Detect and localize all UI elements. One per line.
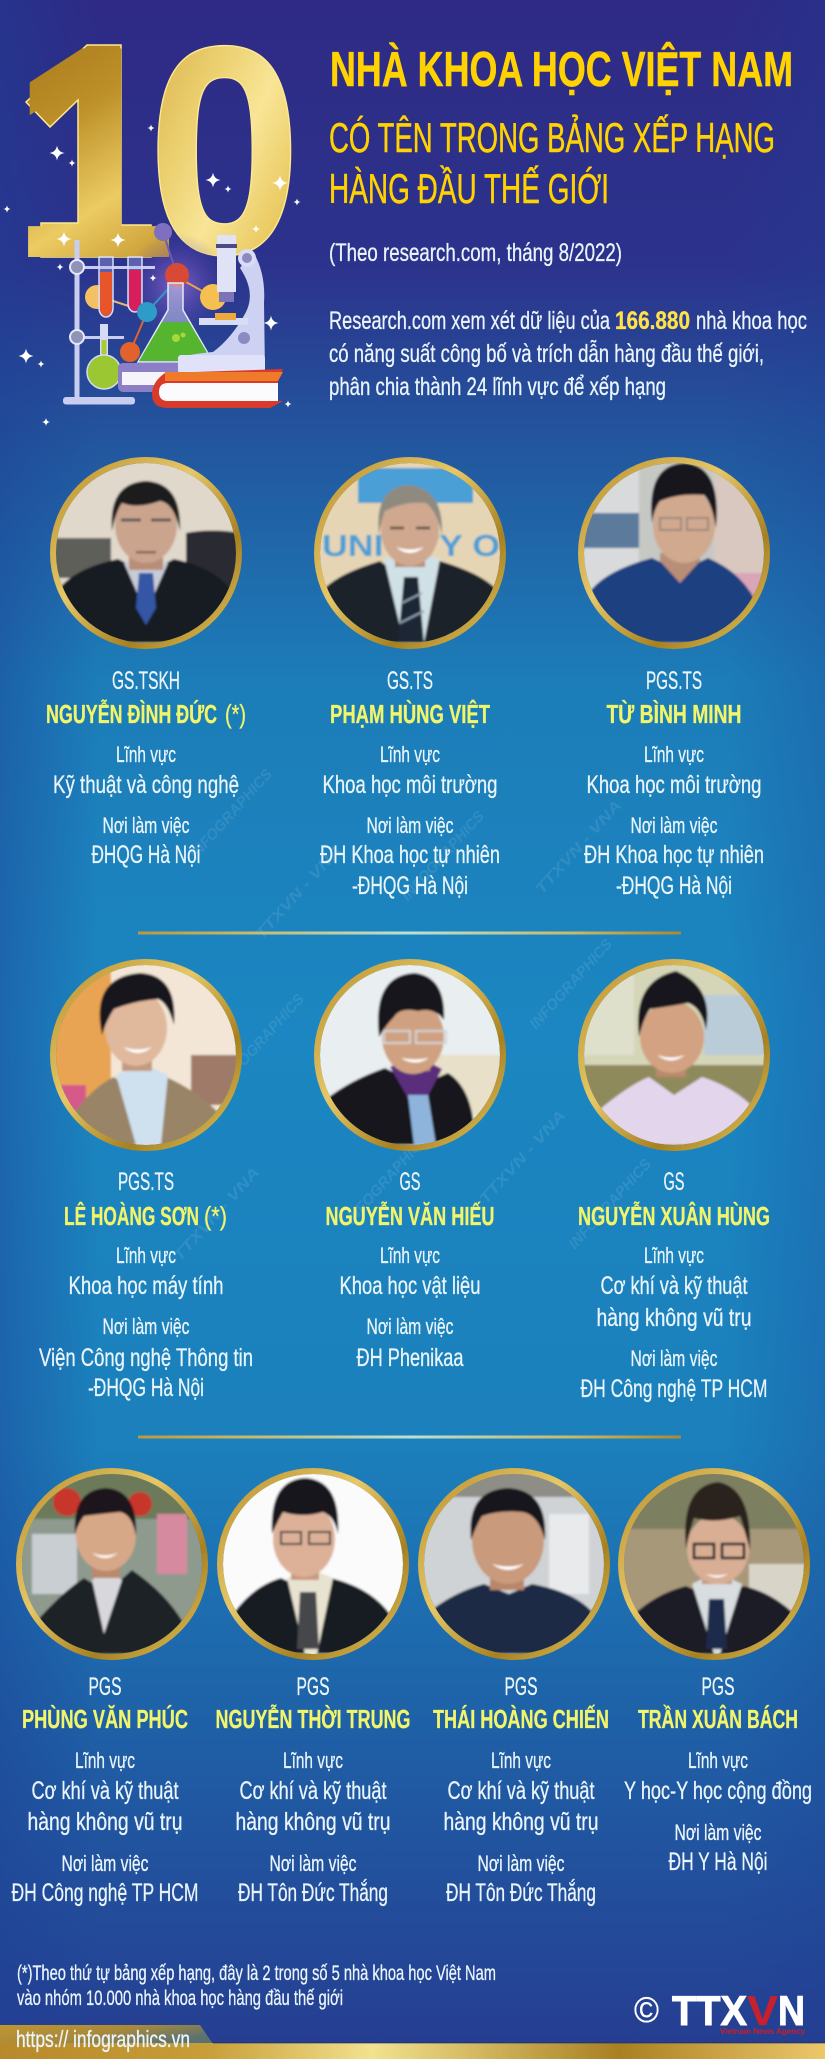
- workplace: [92, 813, 200, 869]
- field: [596, 1243, 752, 1332]
- intro paragraph: 166.880: [615, 307, 690, 335]
- workplace: [12, 1851, 198, 1907]
- name: THÁI HOÀNG CHIẾN: [433, 1704, 609, 1734]
- icon: molecule balls: [120, 223, 226, 362]
- field: Khoa học máy tính: [68, 1272, 224, 1300]
- portrait: [17, 1469, 207, 1659]
- big number 10: [9, 0, 302, 322]
- role: PGS: [702, 1673, 734, 1701]
- field: Kỹ thuật và công nghệ: [53, 771, 239, 799]
- panel: Lê Hoàng Sơn: [39, 960, 253, 1402]
- field: Lĩnh vực: [644, 1243, 704, 1268]
- name: LÊ HOÀNG SƠN: [64, 1201, 199, 1231]
- panel: Từ Bình Minh: [579, 458, 769, 900]
- divider 1: [138, 932, 681, 934]
- workplace: ĐH Phenikaa: [356, 1344, 464, 1372]
- portrait: [218, 1469, 408, 1659]
- workplace: Nơi làm việc: [630, 813, 718, 838]
- field: Lĩnh vực: [283, 1748, 343, 1773]
- portrait: [579, 458, 769, 648]
- workplace: ĐHQG Hà Nội: [92, 841, 200, 869]
- title: [329, 42, 793, 212]
- logo: TTXVN: TTX: [672, 1987, 747, 2034]
- workplace: -ĐHQG Hà Nội: [616, 872, 732, 900]
- field: [28, 1748, 182, 1836]
- name: NGUYỄN VĂN HIẾU: [326, 1201, 494, 1231]
- icon: conical flask: [138, 283, 213, 362]
- intro paragraph: Research.com xem xét dữ liệu của: [329, 307, 610, 335]
- footnote: vào nhóm 10.000 nhà khoa học hàng đầu thế giới: [17, 1987, 343, 2010]
- name: NGUYỄN ĐÌNH ĐỨC: [46, 699, 217, 729]
- logo: TTXVN: [634, 1987, 806, 2036]
- workplace: -ĐHQG Hà Nội: [88, 1374, 204, 1402]
- name: NGUYỄN THỜI TRUNG: [216, 1704, 410, 1734]
- icon: round flask: [87, 324, 121, 389]
- panel: Nguyễn Thời Trung: [216, 1469, 410, 1907]
- field: [68, 1243, 224, 1300]
- intro paragraph: phân chia thành 24 lĩnh vực để xếp hạng: [329, 373, 666, 401]
- name: PHÙNG VĂN PHÚC: [22, 1704, 188, 1734]
- field: [444, 1748, 598, 1836]
- workplace: ĐH Tôn Đức Thắng: [238, 1878, 388, 1907]
- portrait: UNIV TY O: [322, 528, 500, 563]
- workplace: [238, 1851, 388, 1907]
- icon: purple book: [118, 363, 180, 392]
- workplace: Nơi làm việc: [270, 1851, 356, 1876]
- role: PGS.TS: [118, 1168, 174, 1196]
- workplace: [584, 813, 764, 900]
- watermarks: TTXVN - VNA: [252, 842, 345, 943]
- field: Lĩnh vực: [116, 1243, 176, 1268]
- workplace: [356, 1314, 464, 1372]
- icon: retort stand: [63, 240, 155, 404]
- workplace: ĐH Y Hà Nội: [668, 1848, 768, 1876]
- workplace: Nơi làm việc: [630, 1346, 718, 1371]
- watermarks: INFOGRAPHICS: [398, 808, 488, 905]
- panel: Nguyễn Xuân Hùng: [578, 960, 770, 1403]
- workplace: [446, 1851, 596, 1907]
- field: Khoa học môi trường: [586, 771, 762, 799]
- workplace: Nơi làm việc: [478, 1851, 564, 1876]
- role: GS.TSKH: [112, 667, 180, 695]
- field: hàng không vũ trụ: [444, 1808, 598, 1836]
- name: TỪ BÌNH MINH: [606, 699, 742, 729]
- bottom bar: [0, 2025, 825, 2059]
- footnote: [17, 1962, 496, 2010]
- logo: TTXVN: ©: [634, 1989, 659, 2030]
- role: PGS: [504, 1673, 538, 1701]
- field: Khoa học vật liệu: [340, 1272, 480, 1300]
- field: Cơ khí và kỹ thuật: [32, 1777, 179, 1805]
- workplace: ĐH Khoa học tự nhiên: [320, 841, 500, 869]
- role: PGS: [88, 1673, 122, 1701]
- workplace: Nơi làm việc: [102, 813, 190, 838]
- field: Lĩnh vực: [75, 1748, 135, 1773]
- field: Lĩnh vực: [380, 1243, 440, 1268]
- portrait: [315, 960, 505, 1150]
- panel: Nguyễn Đình Đức: [46, 458, 246, 869]
- field: hàng không vũ trụ: [236, 1808, 390, 1836]
- field: Cơ khí và kỹ thuật: [448, 1777, 595, 1805]
- field: Cơ khí và kỹ thuật: [600, 1272, 748, 1300]
- workplace: [39, 1314, 253, 1402]
- field: Lĩnh vực: [644, 742, 704, 767]
- field: Lĩnh vực: [491, 1748, 551, 1773]
- logo: TTXVN: N: [778, 1987, 805, 2034]
- field: Lĩnh vực: [116, 742, 176, 767]
- divider 2: [138, 1436, 681, 1438]
- portrait: [51, 960, 241, 1150]
- illustration: laboratory equipment: [3, 124, 301, 426]
- workplace: Nơi làm việc: [366, 813, 454, 838]
- icon: molecule links: [85, 232, 213, 352]
- role: PGS.TS: [646, 667, 702, 695]
- watermarks: [170, 766, 655, 1265]
- icon: red book: [152, 369, 283, 408]
- portrait: [619, 1469, 809, 1659]
- portrait: [315, 458, 505, 648]
- icon: microscope: [178, 235, 265, 372]
- workplace: [580, 1346, 768, 1403]
- workplace: Viện Công nghệ Thông tin: [39, 1344, 253, 1372]
- workplace: ĐH Khoa học tự nhiên: [584, 841, 764, 869]
- intro paragraph: [329, 307, 807, 401]
- role: PGS: [296, 1673, 330, 1701]
- watermarks: INFOGRAPHICS: [186, 766, 276, 863]
- name: PHẠM HÙNG VIỆT: [330, 699, 490, 729]
- role: GS: [664, 1168, 684, 1196]
- workplace: Nơi làm việc: [674, 1820, 762, 1845]
- url: https:// infographics.vn: [16, 2026, 190, 2052]
- field: [624, 1748, 812, 1805]
- watermarks: INFOGRAPHICS: [565, 1156, 655, 1253]
- panel: Phùng Văn Phúc: [12, 1469, 207, 1907]
- panel: Trần Xuân Bách: [619, 1469, 812, 1876]
- name: (*): [225, 699, 246, 729]
- workplace: Nơi làm việc: [366, 1314, 454, 1339]
- portrait: [579, 960, 769, 1150]
- field: Khoa học môi trường: [322, 771, 498, 799]
- watermarks: TTXVN - VNA: [532, 797, 625, 898]
- icon: sparkles: [3, 124, 301, 426]
- watermarks: TTXVN - VNA: [476, 1107, 569, 1208]
- portrait: [51, 458, 241, 648]
- title: HÀNG ĐẦU THẾ GIỚI: [329, 165, 609, 212]
- field: Lĩnh vực: [380, 742, 440, 767]
- panel: Nguyễn Văn Hiếu: [315, 960, 505, 1372]
- field: [322, 742, 498, 799]
- field: Cơ khí và kỹ thuật: [240, 1777, 387, 1805]
- field: hàng không vũ trụ: [596, 1304, 752, 1332]
- field: [53, 742, 239, 799]
- panel: Thái Hoàng Chiến: [419, 1469, 609, 1907]
- role: GS: [400, 1168, 420, 1196]
- field: Lĩnh vực: [688, 1748, 748, 1773]
- field: hàng không vũ trụ: [28, 1808, 182, 1836]
- watermarks: INFOGRAPHICS: [342, 1131, 432, 1228]
- workplace: [320, 813, 500, 900]
- workplace: ĐH Tôn Đức Thắng: [446, 1878, 596, 1907]
- logo: TTXVN: V: [747, 1987, 778, 2034]
- workplace: Nơi làm việc: [62, 1851, 148, 1876]
- panel: Phạm Hùng Việt: [315, 458, 505, 900]
- workplace: [668, 1820, 768, 1876]
- watermarks: TTXVN - VNA: [170, 1164, 263, 1265]
- field: [340, 1243, 480, 1300]
- workplace: -ĐHQG Hà Nội: [352, 872, 468, 900]
- source note: (Theo research.com, tháng 8/2022): [329, 239, 622, 267]
- watermarks: INFOGRAPHICS: [218, 991, 308, 1088]
- icon: test tubes: [99, 257, 142, 317]
- name: (*): [204, 1201, 227, 1231]
- field: [586, 742, 762, 799]
- workplace: Nơi làm việc: [102, 1314, 190, 1339]
- portrait: [419, 1469, 609, 1659]
- field: [236, 1748, 390, 1836]
- workplace: ĐH Công nghệ TP HCM: [12, 1879, 198, 1907]
- logo: TTXVN: Vietnam News Agency: [720, 2027, 806, 2036]
- footnote: (*)Theo thứ tự bảng xếp hạng, đây là 2 trong số 5 nhà khoa học Việt Nam: [17, 1962, 496, 1985]
- watermarks: INFOGRAPHICS: [526, 936, 616, 1033]
- role: GS.TS: [387, 667, 433, 695]
